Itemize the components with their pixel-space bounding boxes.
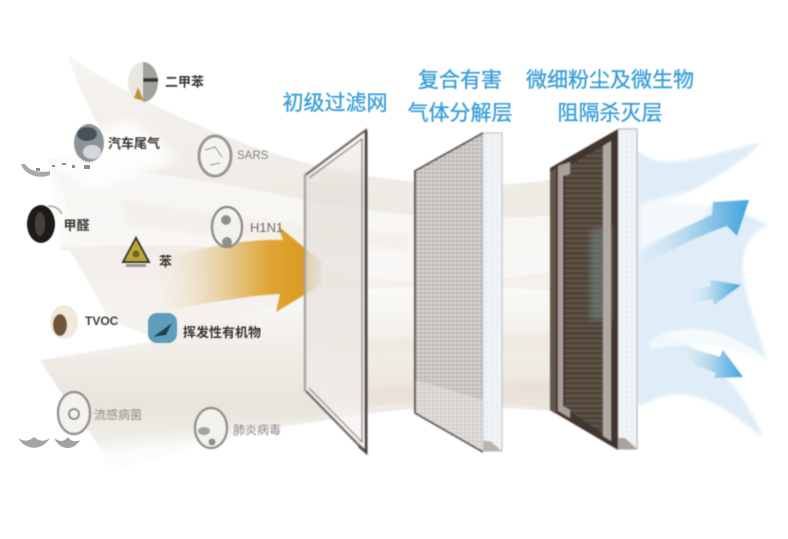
pathogen: influenza [58,392,142,434]
pathogen: pneumonia virus [195,408,281,448]
pollutant: vehicle exhaust [74,124,160,162]
heading: gas decomposition layer [408,69,512,125]
partial virus icon, left edge [21,163,90,177]
pollutant: SARS virus: SARS [237,150,269,162]
filter panel: gas decomposition layer [415,133,502,452]
blue outflow streams [637,142,768,438]
pollutant: benzene warning sign: 苯 [159,254,172,269]
heading: particulate and microbe barrier layer: 阻隔杀灭层 [558,102,662,125]
pollutant: volatile organic compounds [148,313,261,343]
pathogen: pneumonia virus: 肺炎病毒 [233,422,281,437]
pollutant: TVOC: TVOC [85,314,119,328]
blue arrow top [640,200,749,264]
pollutant: volatile organic compounds: 挥发性有机物 [183,325,261,340]
partial virus icons, lower left [18,437,80,448]
gold arrow [150,226,322,314]
filter panel: primary filter [305,130,366,452]
pollutant: benzene warning sign [123,238,172,269]
background air streams [0,55,560,490]
pollutant: formaldehyde: 甲醛 [64,218,90,233]
pollutant: SARS virus [199,136,269,176]
pollutant: TVOC [50,305,119,339]
blue arrow bottom [682,345,743,378]
pollutant: formaldehyde [27,205,90,243]
pollutant: vehicle exhaust: 汽车尾气 [108,136,160,151]
heading: primary filter: 初级过滤网 [282,92,388,115]
pollutant: xylene [128,62,204,102]
heading: gas decomposition layer: 气体分解层 [408,102,512,125]
blue arrow middle [690,280,741,305]
pathogen: influenza: 流感病菌 [94,407,142,422]
pollutant: H1N1 virus [212,207,283,247]
pollutant: xylene: 二甲苯 [165,74,204,90]
filter panel: particulate and microbe barrier layer [550,129,637,450]
heading: particulate and microbe barrier layer [526,69,694,125]
pollutant: H1N1 virus: H1N1 [250,220,283,235]
heading: particulate and microbe barrier layer: 微细粉尘及微生物 [526,69,694,92]
heading: gas decomposition layer: 复合有害 [418,69,502,92]
